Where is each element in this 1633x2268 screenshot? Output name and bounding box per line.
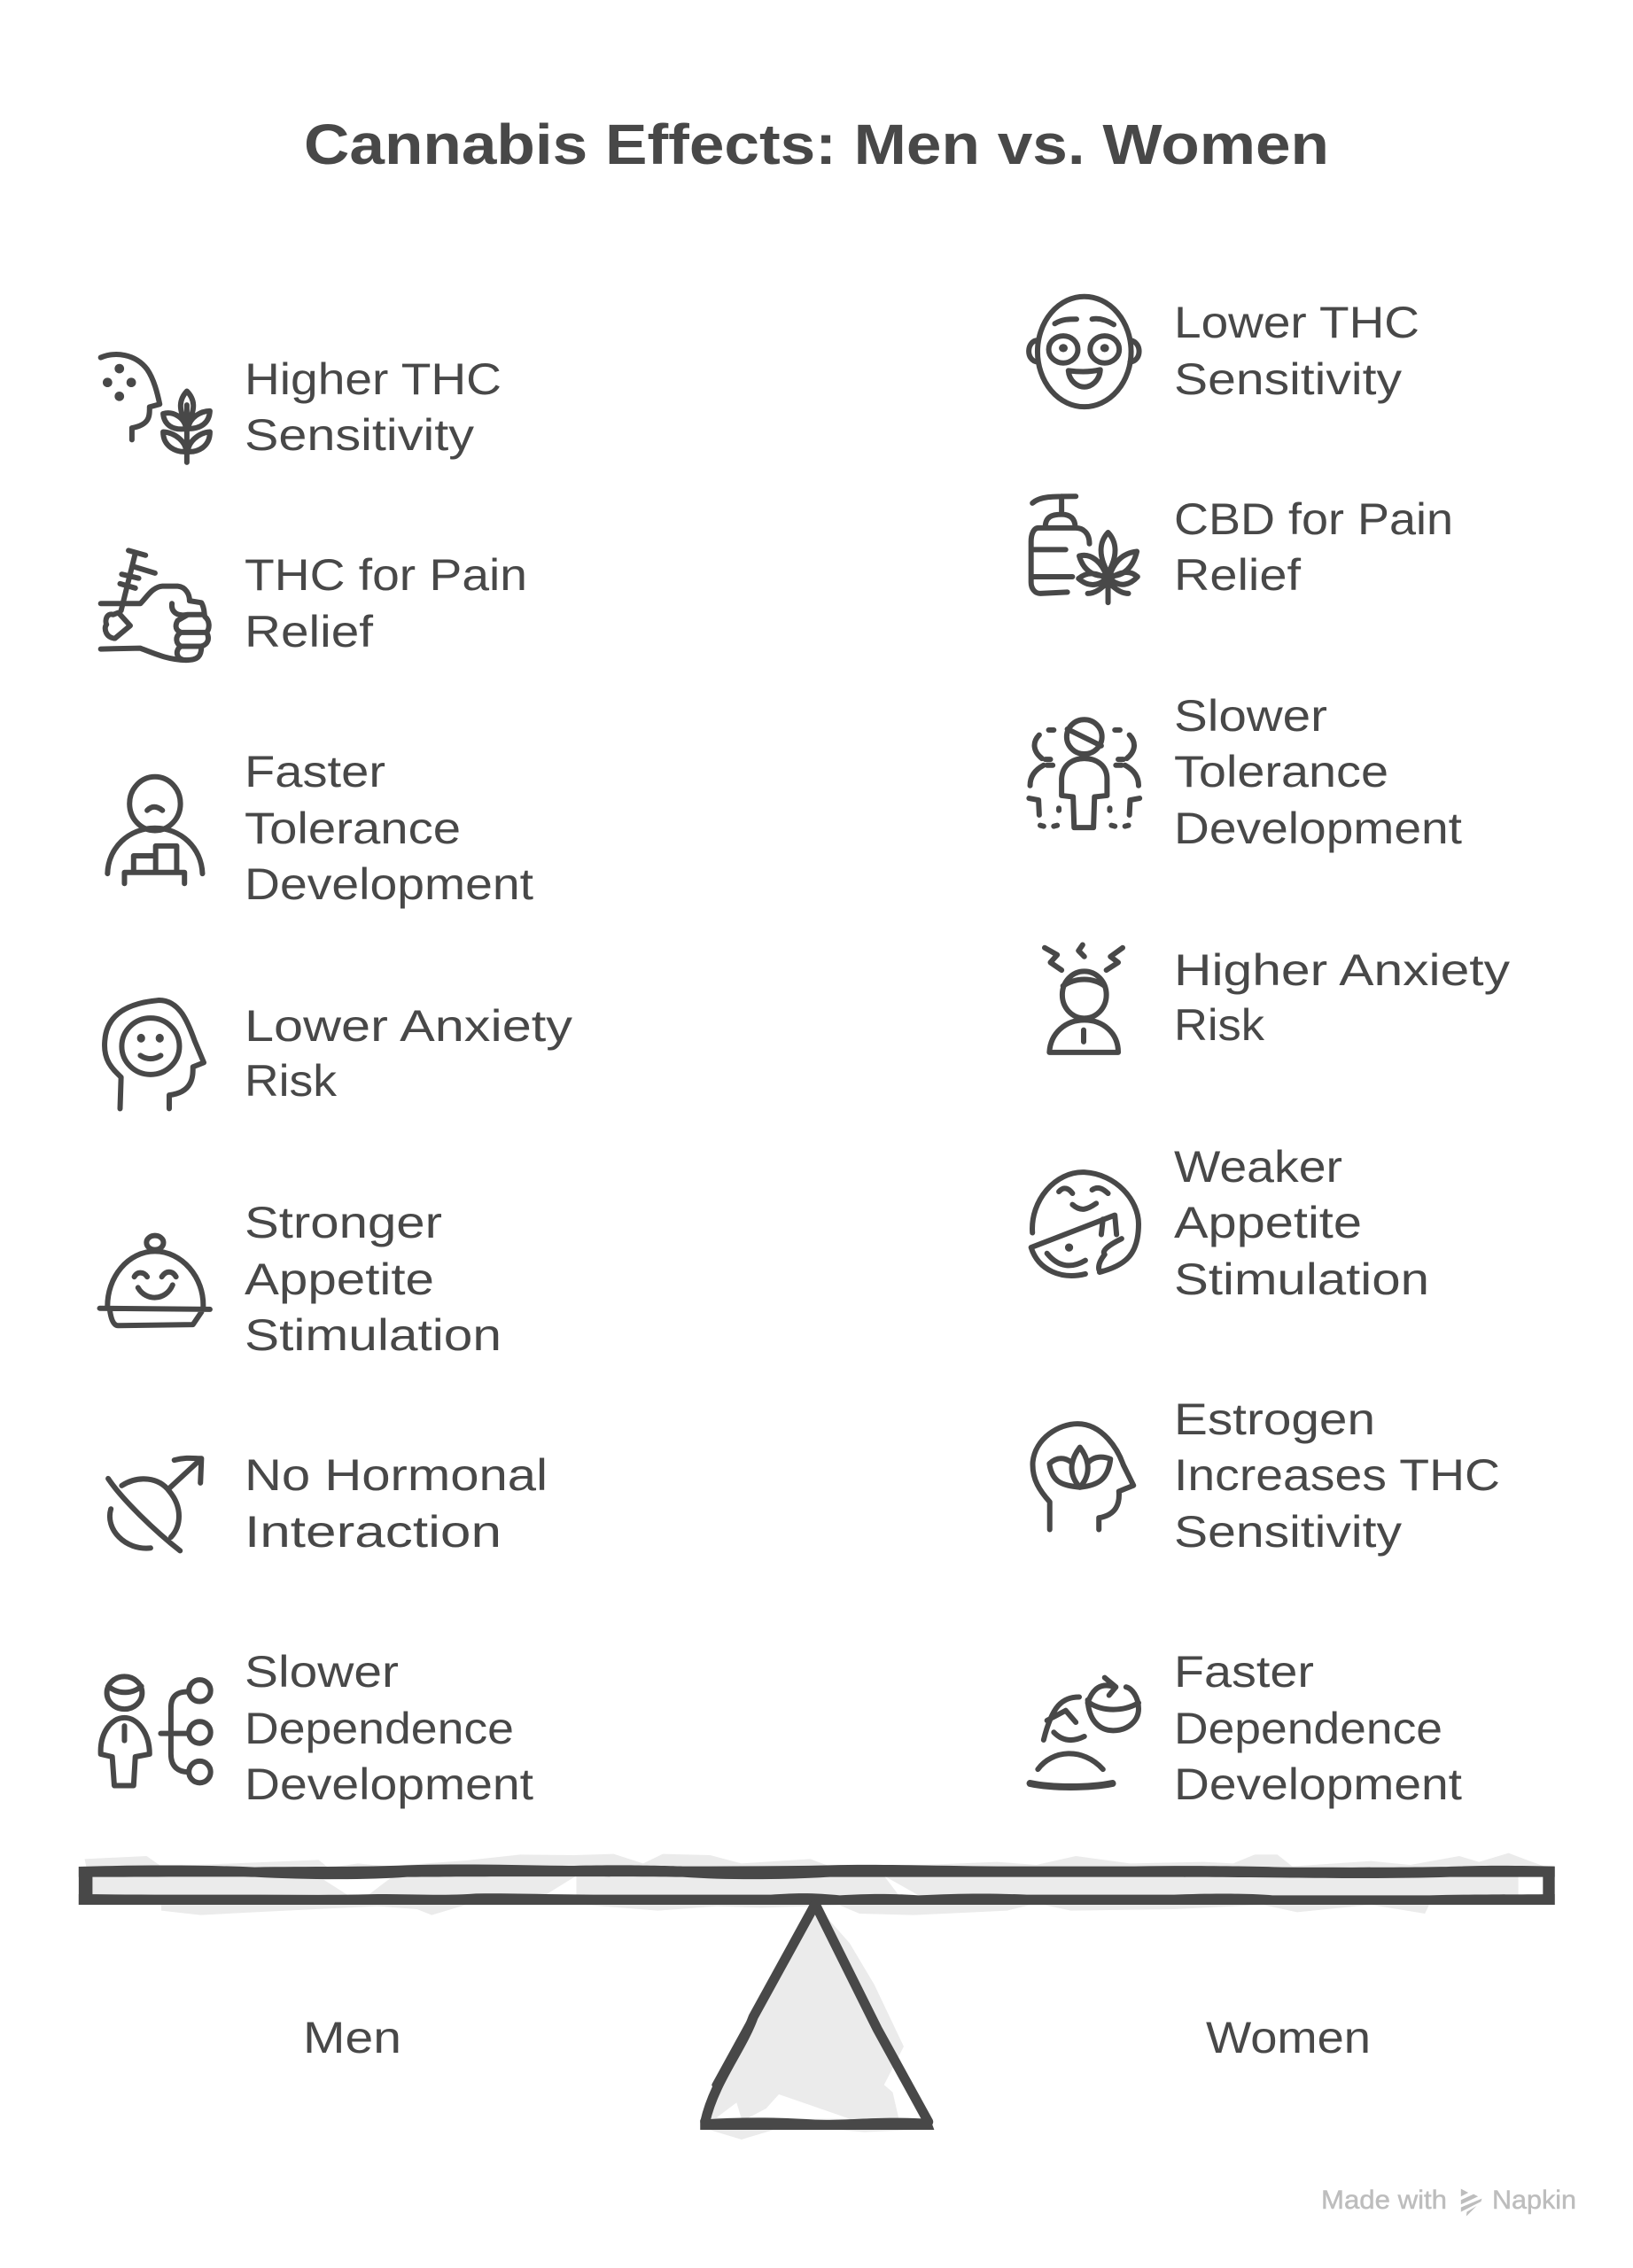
icon: face with watermelon slice [1031,1172,1139,1276]
item: estrogen increases THC sensitivity [1032,1394,1500,1557]
label: lower THC sensitivity [1174,298,1419,404]
label: no hormonal interaction: No Hormonal [245,1450,548,1500]
label: weaker appetite stimulation: Stimulation [1174,1254,1429,1304]
label: no hormonal interaction [245,1450,548,1557]
label: CBD for pain relief: Relief [1174,550,1301,600]
label: faster dependence development [1174,1647,1462,1809]
label: lower anxiety risk: Lower Anxiety [245,1001,572,1051]
label: estrogen increases THC sensitivity: Increases THC [1174,1450,1500,1500]
item: slower tolerance development [1029,691,1462,853]
icon: head with wheat [101,354,210,462]
label: higher THC sensitivity [245,354,502,460]
item: CBD for pain relief [1031,494,1453,602]
label: women: Women [1206,2013,1371,2062]
label: THC for pain relief: THC for Pain [245,550,527,600]
label: estrogen increases THC sensitivity: Estrogen [1174,1394,1375,1444]
icon: fist with syringe [101,550,209,660]
footer: made with napkin: Made with [1321,2186,1447,2215]
label: higher THC sensitivity: Sensitivity [245,410,474,460]
label: lower THC sensitivity: Lower THC [1174,298,1419,347]
label: slower dependence development: Development [245,1759,533,1809]
label: slower tolerance development: Development [1174,804,1462,853]
label: slower tolerance development: Slower [1174,691,1327,741]
label: THC for pain relief [245,550,527,656]
label: weaker appetite stimulation: Appetite [1174,1198,1362,1247]
icon: head with lotus [1032,1424,1133,1529]
icon: person with dashed outline [1029,719,1139,827]
icon: person with cycle arrow [1030,1678,1139,1787]
item: lower THC sensitivity [1029,297,1419,407]
label: slower dependence development: Slower [245,1647,399,1697]
item: higher THC sensitivity [101,354,502,462]
item: faster tolerance development [107,747,533,909]
item: stronger appetite stimulation [100,1198,502,1360]
label: slower dependence development: Dependence [245,1704,514,1753]
item: faster dependence development [1030,1647,1462,1809]
label: stronger appetite stimulation [245,1198,502,1360]
item: higher anxiety risk [1045,944,1510,1052]
footer: made with napkin: Napkin [1492,2186,1576,2215]
label: estrogen increases THC sensitivity: Sensitivity [1174,1507,1402,1557]
icon: napkin logo [1461,2189,1481,2217]
label: faster dependence development: Dependence [1174,1704,1442,1753]
label: weaker appetite stimulation: Weaker [1174,1142,1342,1192]
label: stronger appetite stimulation: Appetite [245,1254,434,1304]
label: no hormonal interaction: Interaction [245,1507,502,1557]
label: faster tolerance development [245,747,533,909]
footer: made with napkin [1321,2186,1576,2217]
icon: person with branches [101,1676,211,1785]
icon: pump bottle with cannabis leaf [1031,496,1138,602]
label: higher anxiety risk: Risk [1174,1000,1265,1050]
icon: smiling cloche [100,1236,210,1325]
label: faster tolerance development: Tolerance [245,804,461,853]
label: men: Men [303,2013,401,2062]
label: lower anxiety risk [245,1001,572,1106]
icon: surprised face [1029,297,1139,407]
icon: person with blocks [107,777,202,883]
label: faster dependence development: Development [1174,1759,1462,1809]
label: CBD for pain relief: CBD for Pain [1174,494,1453,544]
balance scale: fulcrum triangle [700,1904,934,2140]
icon: head with smiling face [105,1000,204,1108]
label: weaker appetite stimulation [1174,1142,1429,1304]
item: THC for pain relief [101,550,527,660]
panel: women column [1029,297,1510,1809]
label: higher anxiety risk [1174,945,1510,1050]
label: lower THC sensitivity: Sensitivity [1174,354,1402,404]
label: higher anxiety risk: Higher Anxiety [1174,945,1510,995]
label: faster tolerance development: Development [245,859,533,909]
label: estrogen increases THC sensitivity [1174,1394,1500,1557]
icon: anxious person [1045,944,1123,1052]
title: Cannabis Effects: Men vs. Women [304,113,1329,176]
label: slower dependence development [245,1647,533,1809]
label: higher THC sensitivity: Higher THC [245,354,502,404]
panel: men column [100,354,572,1809]
label: stronger appetite stimulation: Stimulation [245,1310,502,1360]
label: CBD for pain relief [1174,494,1453,600]
label: faster dependence development: Faster [1174,1647,1314,1697]
balance scale: beam [79,1853,1555,1915]
item: weaker appetite stimulation [1031,1142,1429,1304]
item: no hormonal interaction [108,1450,548,1557]
label: THC for pain relief: Relief [245,607,373,656]
label: slower tolerance development [1174,691,1462,853]
label: faster tolerance development: Faster [245,747,385,796]
item: slower dependence development [101,1647,533,1809]
item: lower anxiety risk [105,1000,572,1108]
icon: crossed male symbol [108,1458,201,1550]
label: slower tolerance development: Tolerance [1174,747,1388,796]
label: lower anxiety risk: Risk [245,1056,338,1106]
label: stronger appetite stimulation: Stronger [245,1198,442,1247]
